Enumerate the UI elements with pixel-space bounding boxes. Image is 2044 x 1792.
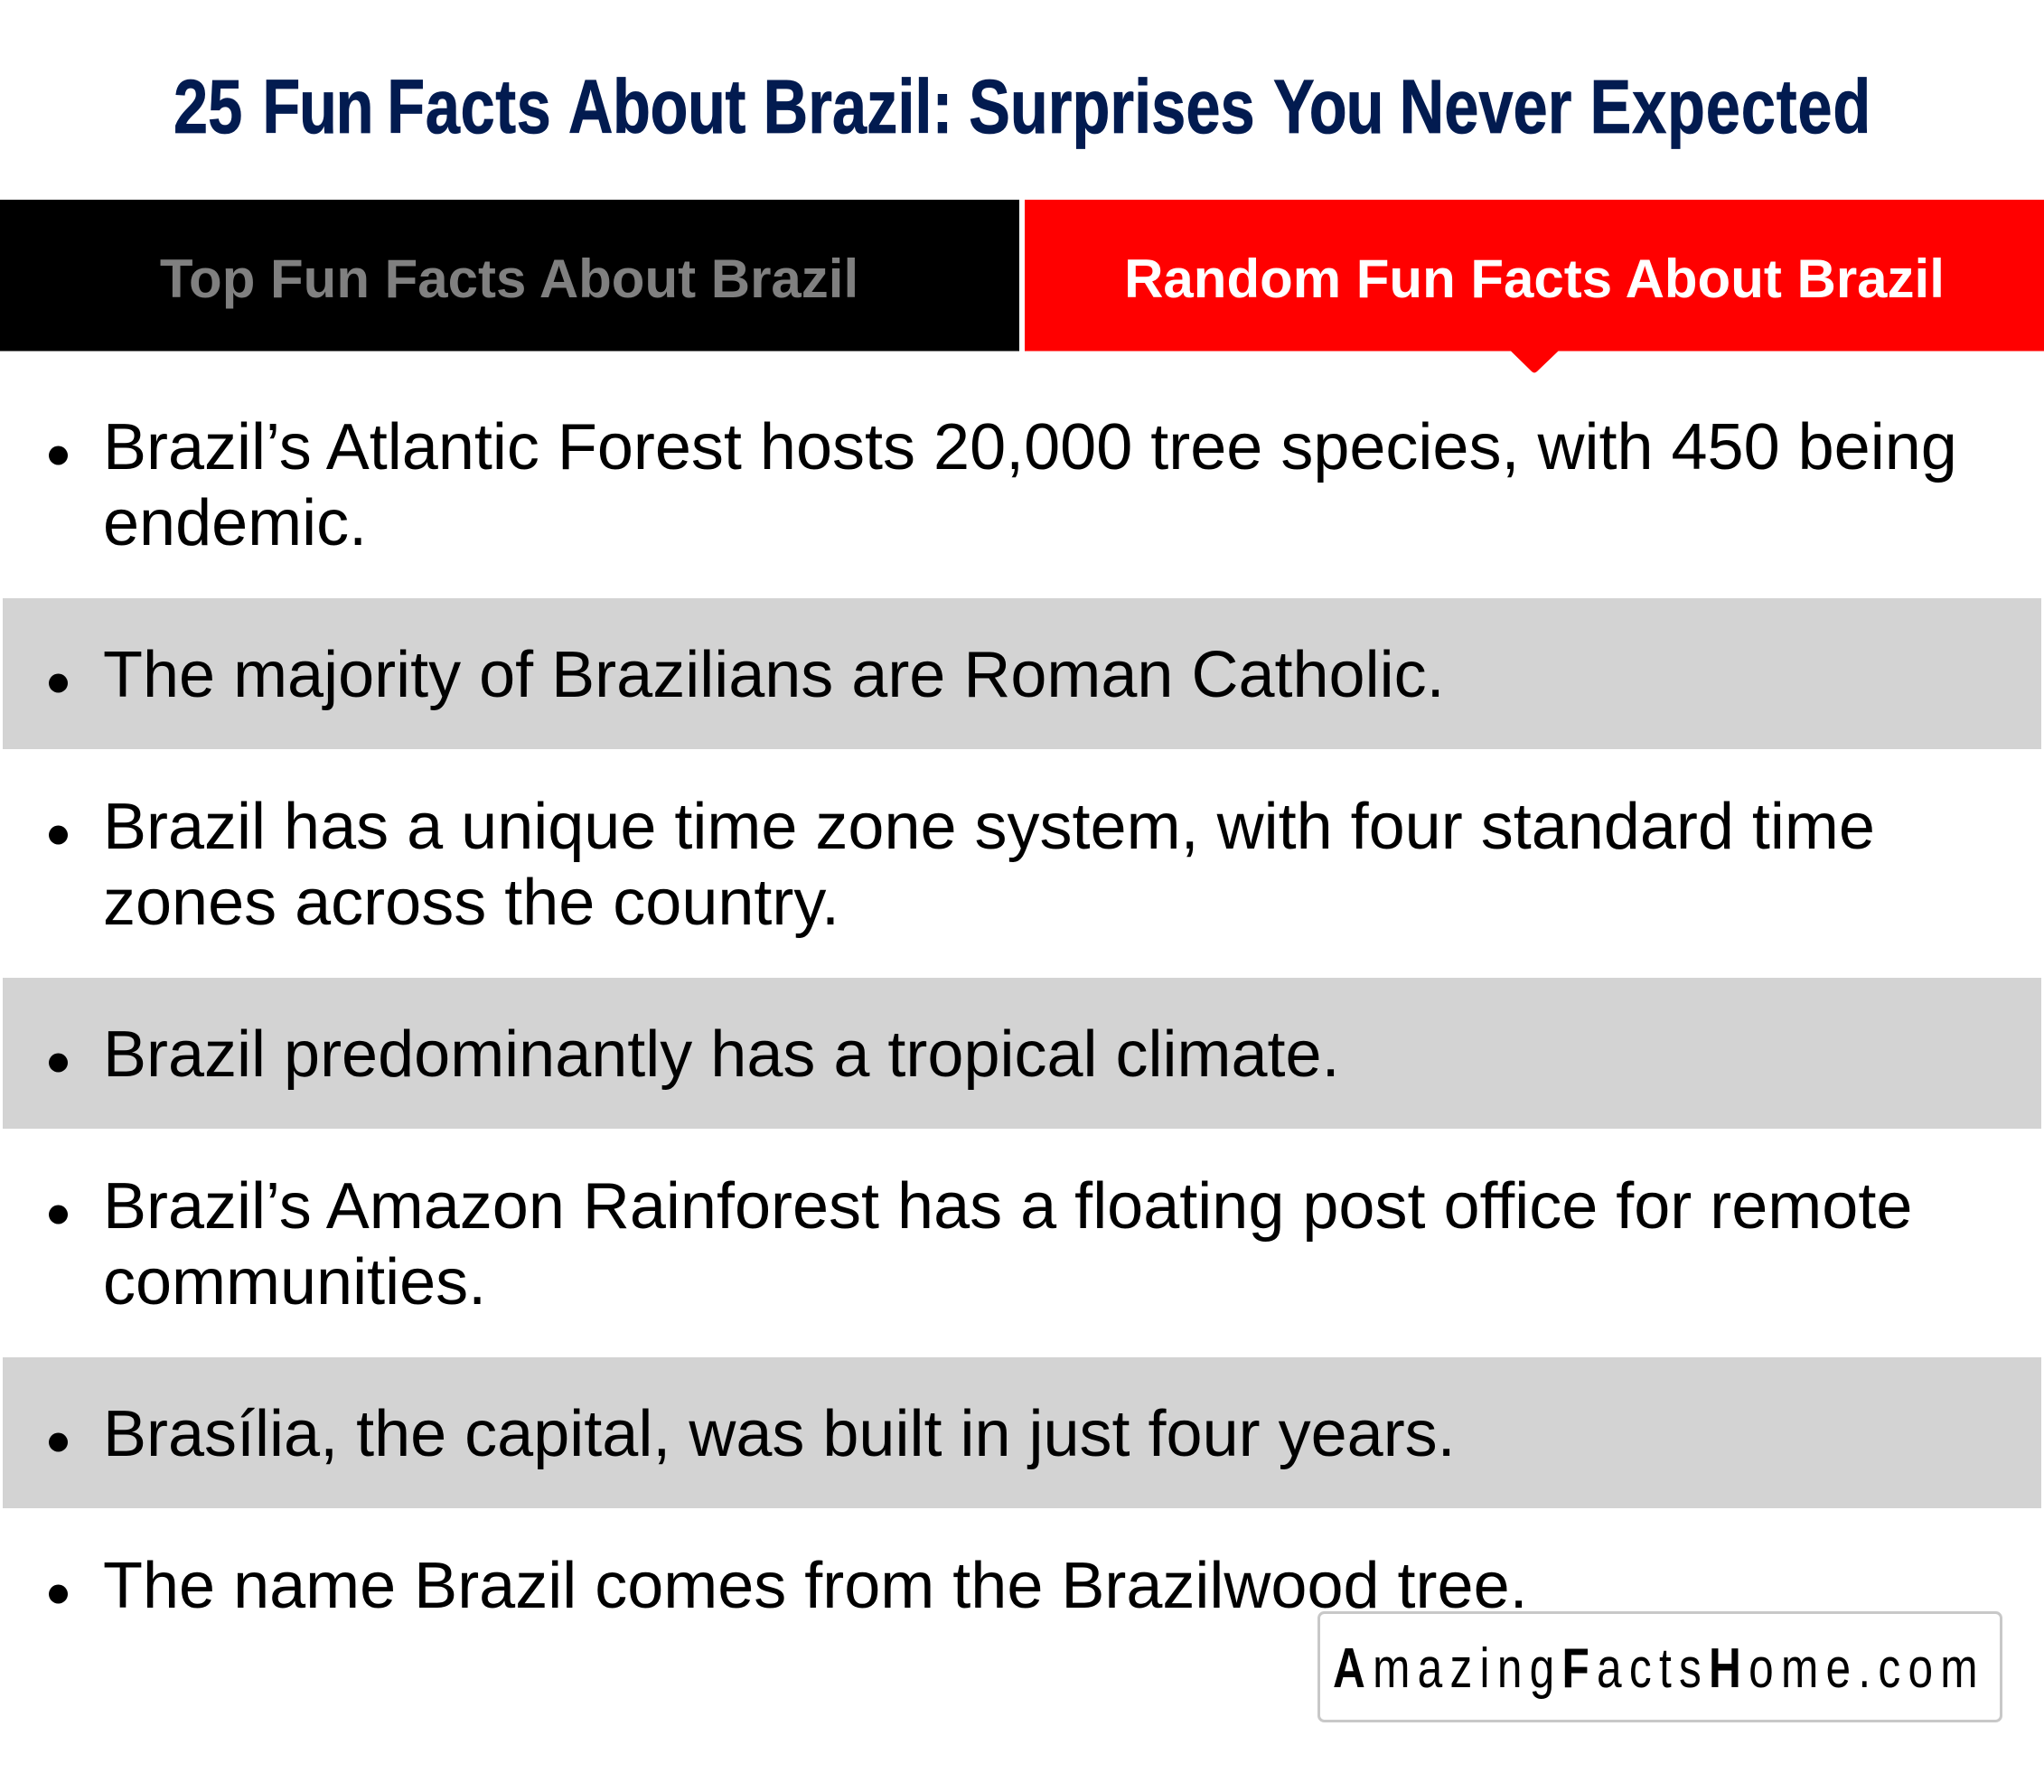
- logo badge: [1319, 1612, 2001, 1721]
- fact 5: [49, 1170, 1912, 1318]
- fact 6: Brasília, the capital, was built in just four years.: [103, 1398, 1456, 1470]
- fact 1: [49, 411, 1957, 559]
- fact 3: Brazil has a unique time zone system, with four standard time: [103, 791, 1875, 863]
- fact 2: [3, 598, 2041, 749]
- tab: top fun facts: [0, 200, 1019, 351]
- title: 25 Fun Facts About Brazil: Surprises You Never Expected: [173, 66, 1871, 150]
- fact 2: The majority of Brazilians are Roman Catholic.: [103, 639, 1445, 711]
- fact 1: Brazil’s Atlantic Forest hosts 20,000 tree species, with 450 being: [103, 411, 1957, 483]
- tab: random fun facts (active): Random Fun Facts About Brazil: [1124, 249, 1945, 309]
- fact 4: Brazil predominantly has a tropical climate.: [103, 1018, 1340, 1091]
- fact 3: [49, 791, 1875, 939]
- logo badge: AmazingFactsHome.com: [1333, 1637, 1978, 1699]
- fact 1: endemic.: [103, 487, 367, 559]
- tab: top fun facts: Top Fun Facts About Brazil: [160, 249, 858, 309]
- tab: random fun facts (active): [1025, 200, 2044, 372]
- fact 6: [3, 1357, 2041, 1508]
- fact 7: The name Brazil comes from the Brazilwood tree.: [103, 1550, 1528, 1622]
- fact 4: [3, 978, 2041, 1129]
- fact 3: zones across the country.: [103, 867, 839, 939]
- fact 5: Brazil’s Amazon Rainforest has a floating post office for remote: [103, 1170, 1912, 1243]
- fact 5: communities.: [103, 1246, 486, 1318]
